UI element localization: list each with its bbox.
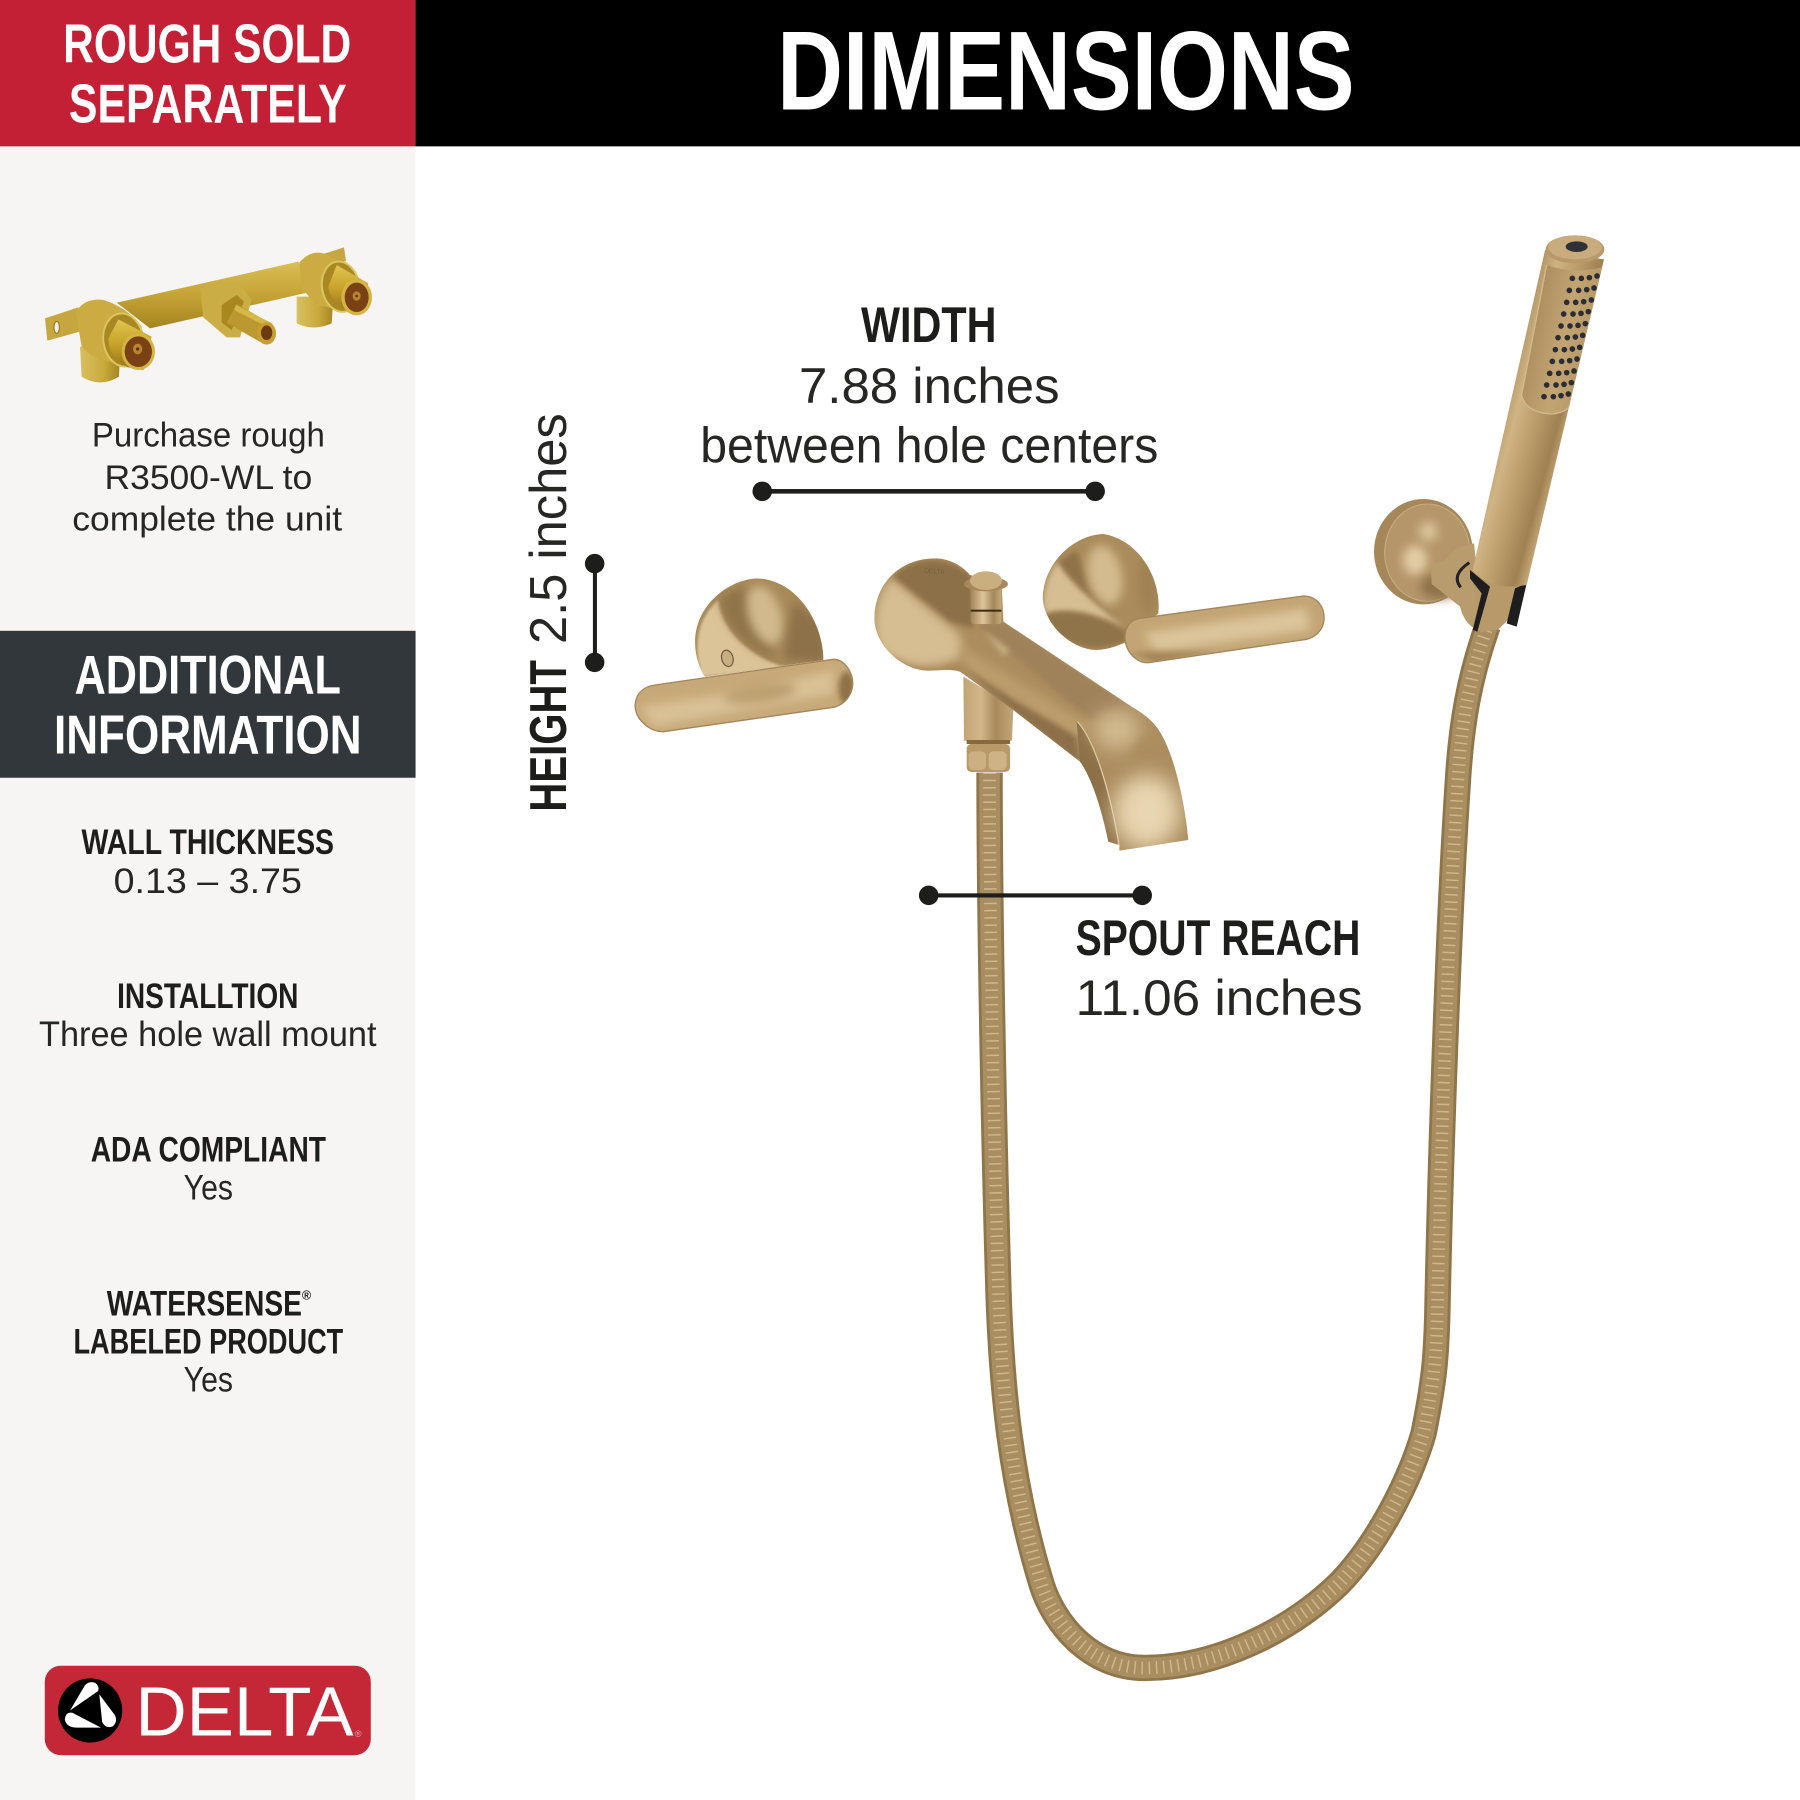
wall mount	[1374, 499, 1483, 631]
black title bar	[416, 0, 1800, 146]
right handle	[1037, 530, 1330, 667]
logo: Delta	[45, 1666, 371, 1755]
dark header: additional information: ADDITIONAL	[75, 643, 341, 705]
hex nut	[967, 744, 1010, 772]
handle body	[1473, 250, 1604, 587]
spec: watersense labeled product: ®	[302, 1288, 312, 1302]
left sidebar panel	[0, 0, 416, 1800]
text: purchase rough note: complete the unit	[72, 500, 343, 538]
spec: watersense labeled product: WATERSENSE	[107, 1284, 302, 1324]
image: rough-in valve	[45, 247, 372, 383]
spout reach callout: SPOUT REACH	[1076, 909, 1360, 966]
backplate	[695, 578, 824, 677]
spec: installation: Three hole wall mount	[39, 1014, 377, 1054]
shower hose	[990, 626, 1488, 1668]
left handle	[630, 573, 857, 737]
tub spout	[874, 558, 1188, 850]
height callout: HEIGHT	[519, 660, 577, 812]
wall post	[963, 677, 1013, 741]
spec: installation: INSTALLTION	[117, 976, 298, 1016]
height dimension line	[585, 554, 604, 672]
spec: wall thickness	[82, 822, 334, 901]
spec: ADA compliant: Yes	[184, 1168, 233, 1208]
spec: watersense labeled product	[73, 1284, 343, 1399]
spout reach callout	[919, 886, 1363, 1026]
width callout: 7.88 inches	[799, 357, 1060, 414]
clip and connector	[1472, 573, 1527, 633]
height callout: 2.5 inches	[519, 413, 577, 644]
logo: Delta: DELTA	[135, 1673, 354, 1751]
width callout: between hole centers	[700, 417, 1158, 474]
spec: watersense labeled product: LABELED PRODUCT	[73, 1321, 343, 1361]
logo: Delta: ®	[355, 1729, 362, 1739]
backplate	[1042, 534, 1159, 650]
spout reach callout: 11.06 inches	[1076, 969, 1363, 1026]
spec: ADA compliant: ADA COMPLIANT	[91, 1130, 326, 1170]
title: DIMENSIONS	[777, 8, 1355, 134]
diverter knob	[964, 571, 1008, 624]
lever	[1126, 596, 1324, 662]
spray nozzles	[1541, 273, 1600, 399]
lever	[636, 660, 852, 731]
red header: rough sold separately	[0, 0, 416, 146]
spec: wall thickness: WALL THICKNESS	[82, 822, 334, 862]
hand shower and wall mount	[1374, 235, 1605, 633]
spray face	[1522, 265, 1605, 414]
spec: watersense labeled product: Yes	[184, 1359, 233, 1399]
spec: ADA compliant	[91, 1130, 326, 1208]
red header: rough sold separately: ROUGH SOLD	[63, 13, 351, 75]
width callout	[700, 296, 1158, 501]
spout reach dimension line	[919, 886, 1152, 905]
text: purchase rough note: R3500-WL to	[104, 459, 312, 497]
spec: installation	[39, 976, 377, 1054]
width dimension line	[752, 482, 1105, 501]
text: purchase rough note: Purchase rough	[92, 417, 325, 455]
spec: wall thickness: 0.13 – 3.75	[114, 861, 302, 901]
red header: rough sold separately: SEPARATELY	[69, 72, 347, 134]
tub spout: DELTA	[924, 568, 945, 576]
spout body	[874, 558, 1188, 850]
top cap	[1546, 235, 1604, 263]
dark header: additional information	[0, 631, 416, 778]
height callout	[519, 413, 604, 812]
text: purchase rough note	[72, 417, 343, 538]
width callout: WIDTH	[861, 296, 996, 353]
dark header: additional information: INFORMATION	[54, 704, 362, 766]
